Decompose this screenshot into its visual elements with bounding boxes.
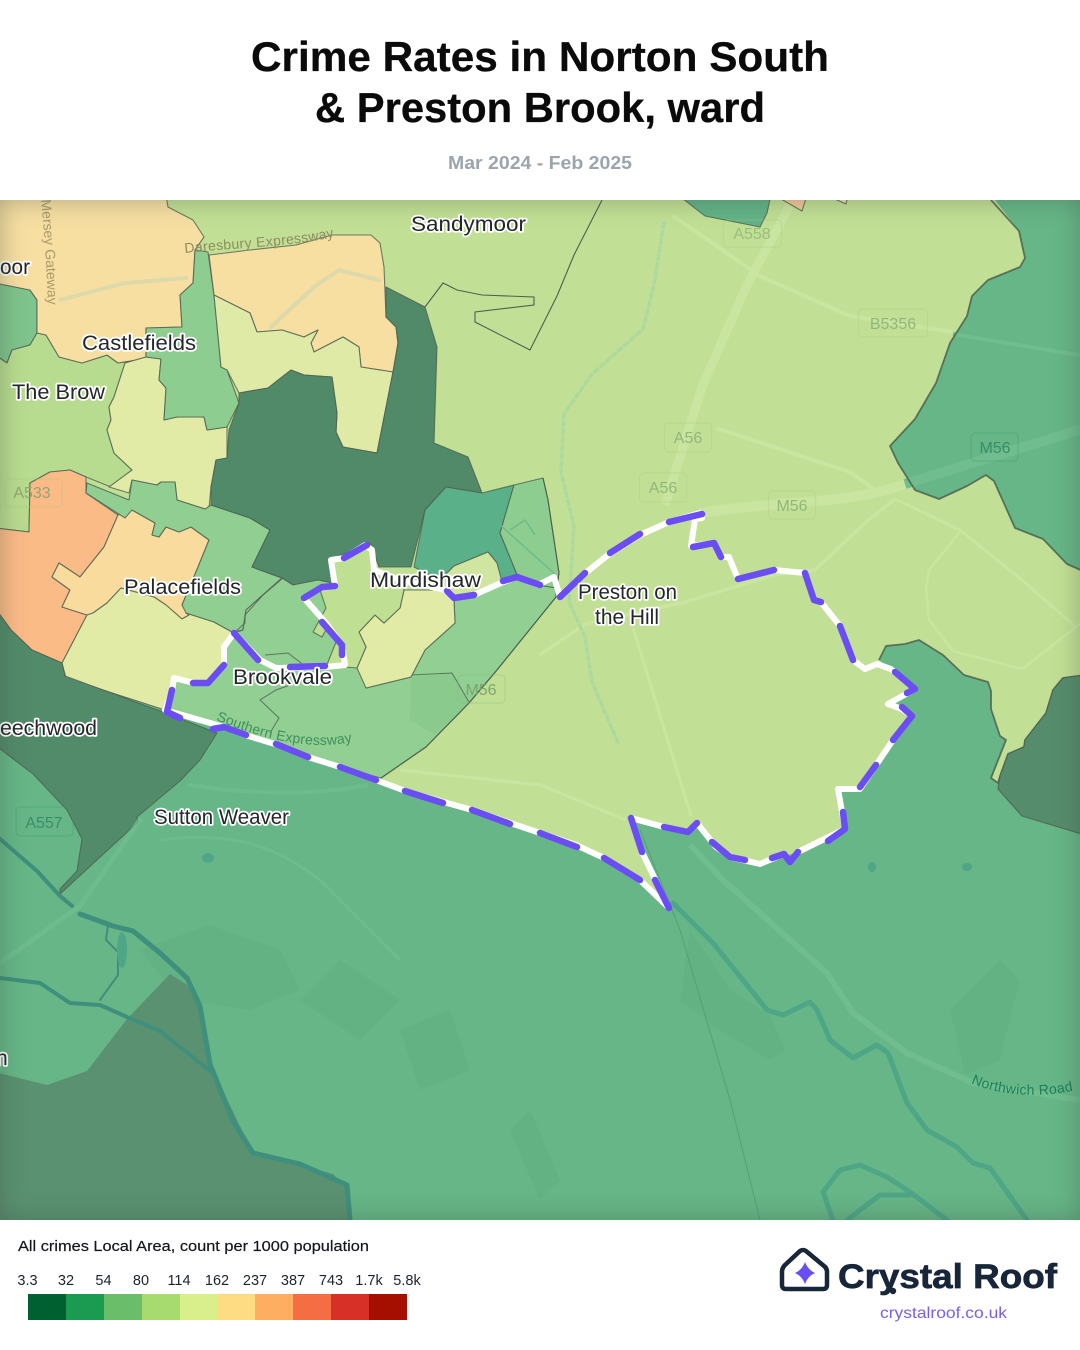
rivers bbox=[0, 839, 350, 1220]
road shields: A533 bbox=[13, 485, 51, 502]
place labels: Brookvale bbox=[233, 666, 332, 689]
region: medium green band bbox=[86, 480, 282, 632]
icon: purple star bbox=[795, 1262, 815, 1284]
region: pale Murdishaw south bbox=[357, 590, 455, 688]
region: Beechwood dark bbox=[0, 608, 217, 894]
legend tick values bbox=[17, 1273, 421, 1289]
region: pale below Daresbury bbox=[214, 295, 393, 453]
icon: house outline bbox=[782, 1250, 827, 1289]
legend colour scale bbox=[28, 1294, 407, 1320]
road shields: A56 bbox=[649, 480, 677, 497]
legend tick values: 237 bbox=[243, 1273, 267, 1289]
region: ward interior light green bbox=[313, 545, 404, 668]
region: Palacefields peach bbox=[52, 510, 209, 619]
woodland patches bbox=[140, 925, 1020, 1200]
region: orange high crime bbox=[0, 470, 118, 663]
region: top A558 teal bbox=[678, 195, 771, 227]
east boundary of light area bbox=[879, 200, 1080, 783]
place labels bbox=[0, 213, 677, 1070]
region: pale enclave above ward line bbox=[440, 552, 502, 598]
region: top peach sliver bbox=[774, 195, 807, 211]
road shields bbox=[5, 220, 1018, 836]
title: & Preston Brook, ward bbox=[315, 84, 765, 131]
region: medium green east of Murdishaw bbox=[500, 478, 559, 588]
boundary between light area and Brookvale bbox=[381, 478, 559, 778]
region: dark green low crime centre bbox=[211, 287, 482, 585]
canal bbox=[561, 222, 664, 745]
legend tick values: 80 bbox=[133, 1273, 149, 1289]
region: Murdishaw teal bbox=[414, 485, 518, 583]
road name: Southern Expressway: Southern Expressway bbox=[217, 712, 351, 746]
region: pale yellow upper middle bbox=[107, 357, 227, 509]
region: bottom-left low crime bbox=[0, 974, 350, 1225]
region: west edge green bbox=[0, 283, 37, 363]
place labels: Sandymoor bbox=[411, 213, 526, 236]
river: east bbox=[673, 903, 1027, 1220]
region: top sliver bbox=[826, 195, 848, 204]
place labels: The Brow bbox=[12, 381, 106, 404]
legend tick values: 743 bbox=[319, 1273, 343, 1289]
A-roads on base west bbox=[0, 785, 400, 963]
roads on base green, east bbox=[905, 334, 1080, 484]
website: crystalroof.co.uk bbox=[880, 1305, 1008, 1322]
logo: Crystal Roof bbox=[782, 1250, 1058, 1322]
region: Daresbury peach bbox=[209, 235, 398, 372]
legend title: All crimes Local Area, count per 1000 population bbox=[18, 1238, 369, 1255]
place labels: the Hill bbox=[595, 606, 659, 629]
ward outline: white bbox=[165, 513, 915, 908]
road shields: M56 bbox=[979, 440, 1011, 457]
region: large light green area bbox=[0, 195, 1080, 908]
place labels: Murdishaw bbox=[370, 569, 482, 592]
region: Castlefields peach bbox=[0, 195, 204, 363]
logo wordmark: Crystal Roof bbox=[838, 1258, 1058, 1296]
footer bbox=[17, 1238, 1058, 1322]
woodland tint east of Brookvale bbox=[410, 673, 469, 735]
place labels: Palacefields bbox=[124, 576, 241, 599]
region: medium green top middle bbox=[146, 250, 239, 430]
road shields: B5356 bbox=[870, 316, 916, 333]
legend tick values: 32 bbox=[58, 1273, 74, 1289]
legend tick values: 3.3 bbox=[17, 1273, 38, 1289]
road name: Mersey Gateway: Mersey Gateway bbox=[41, 200, 56, 304]
base area: medium green bbox=[0, 200, 1080, 1220]
road shields: M56 bbox=[465, 682, 497, 699]
legend tick values: 1.7k bbox=[355, 1273, 383, 1289]
ward outline: purple dashes bbox=[167, 514, 915, 908]
grey local roads bbox=[60, 270, 379, 327]
region: pale yellow lower left bbox=[62, 588, 234, 710]
ponds bbox=[117, 853, 972, 968]
legend tick values: 387 bbox=[281, 1273, 305, 1289]
panel: choropleth map bbox=[0, 200, 1080, 1220]
road shields: A56 bbox=[674, 430, 702, 447]
legend tick values: 114 bbox=[167, 1273, 191, 1289]
road name: Northwich Road: Northwich Road bbox=[972, 1074, 1072, 1095]
Sandymoor boundary lines bbox=[425, 200, 602, 350]
map roads on light area bbox=[400, 205, 1080, 820]
road shields: M56 bbox=[776, 498, 808, 515]
road name: Daresbury Expressway: Daresbury Expressway bbox=[185, 230, 332, 253]
Brookvale sub-boundaries bbox=[235, 578, 469, 733]
legend bbox=[17, 1238, 421, 1320]
title bbox=[251, 33, 829, 131]
place labels: eechwood bbox=[0, 717, 97, 740]
region: south-east dark bbox=[998, 675, 1080, 835]
place labels: Sutton Weaver bbox=[154, 806, 289, 829]
logo wordmark: y tail dot bbox=[890, 1288, 896, 1294]
ward boundary bbox=[165, 513, 915, 908]
region: medium green Brookvale and east bbox=[165, 577, 556, 778]
railway bbox=[640, 830, 760, 1220]
legend tick values: 5.8k bbox=[393, 1273, 421, 1289]
header bbox=[251, 33, 829, 173]
map edge vignette bbox=[0, 200, 1080, 1220]
region: The Brow bbox=[0, 333, 136, 532]
place labels: Preston on bbox=[578, 581, 677, 604]
place labels: Castlefields bbox=[82, 332, 196, 355]
Northwich Road bbox=[690, 845, 1080, 1100]
place labels: oor bbox=[0, 256, 30, 279]
railway sidings bbox=[500, 520, 556, 575]
road shields: A557 bbox=[25, 815, 63, 832]
road shields: A558 bbox=[733, 226, 771, 243]
legend tick values: 54 bbox=[95, 1273, 112, 1289]
title: Crime Rates in Norton South bbox=[251, 33, 829, 80]
subtitle: date range: Mar 2024 - Feb 2025 bbox=[448, 153, 632, 173]
legend tick values: 162 bbox=[205, 1273, 229, 1289]
